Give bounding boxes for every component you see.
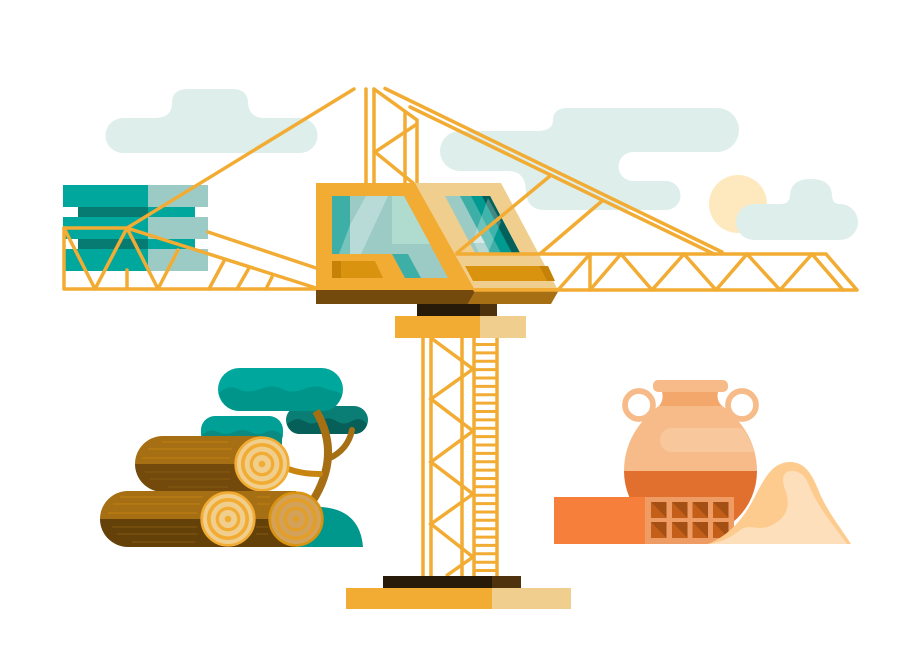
vase neck [659,392,722,406]
tree with foliage [201,368,368,547]
log end rings left [202,493,254,545]
log: lower [100,491,322,547]
ladder rungs [474,344,497,570]
brick [554,497,734,544]
cloud: right [736,179,858,240]
foliage: large [218,368,343,411]
log stack [100,436,322,547]
crane cab: floor [316,288,559,304]
brick holes [651,502,728,538]
ground bush [270,507,363,547]
branch right [328,430,352,459]
vase highlight [660,428,754,452]
crane right jib truss [385,88,857,290]
tower base [346,576,571,609]
crane tower mast top [366,89,417,185]
cloud: centre right [440,108,739,210]
log end rings right [270,493,322,545]
crane cab: light side [415,183,558,290]
crane cab: front [316,183,475,290]
sand pile [708,462,851,544]
slewing ring [417,304,497,316]
vase handles [625,391,653,419]
tower mast [423,338,497,576]
crane left jib truss [64,89,354,289]
stack of teal planks [63,185,208,271]
foliage: small dark [286,406,368,434]
log: upper [135,436,288,492]
log end rings [236,438,288,490]
clay vase [624,380,757,538]
foliage: left small [201,416,283,448]
branch left [286,468,320,474]
vase body [624,405,757,471]
cloud: upper left [106,89,318,153]
vase lip [653,380,728,392]
sun [709,175,767,233]
trunk [312,411,328,502]
tower top plate [395,316,526,338]
